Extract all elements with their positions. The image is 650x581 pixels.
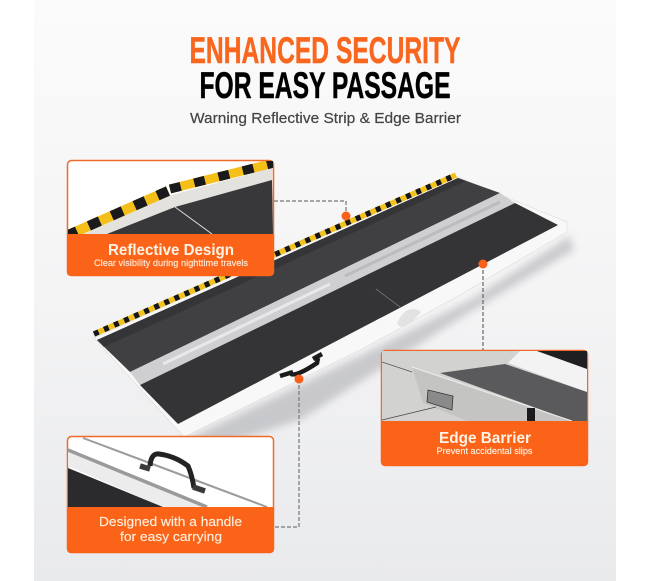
connector: edge barrier xyxy=(482,264,484,350)
caption text: Clear visibility during nighttime travels xyxy=(94,258,249,268)
title: FOR EASY PASSAGE xyxy=(200,65,450,106)
caption heading: Edge Barrier xyxy=(439,430,531,447)
panel: handle xyxy=(67,436,274,553)
caption heading: Reflective Design xyxy=(108,242,234,259)
title xyxy=(190,30,461,106)
marker dot: edge xyxy=(478,260,488,268)
ramp body xyxy=(94,176,567,437)
lower deck xyxy=(140,203,558,424)
marker dot: strip xyxy=(342,212,350,220)
caption text: Designed with a handle xyxy=(99,514,242,529)
caption band xyxy=(67,507,274,553)
connector: handle xyxy=(274,379,299,527)
caption band xyxy=(381,421,588,466)
warning strip xyxy=(94,175,456,334)
title: ENHANCED SECURITY xyxy=(190,30,461,71)
marker dot: handle xyxy=(294,374,304,384)
hinge bump xyxy=(397,309,421,326)
ramp illustration xyxy=(94,175,574,452)
photo: reflective strip close-up xyxy=(66,163,274,236)
caption text: for easy carrying xyxy=(120,529,222,544)
center rail xyxy=(130,193,515,385)
photo: edge barrier close-up xyxy=(382,351,587,421)
photo: handle close-up xyxy=(68,438,267,507)
hinge line xyxy=(376,289,400,307)
panel: edge barrier xyxy=(381,350,588,466)
subtitle: Warning Reflective Strip & Edge Barrier xyxy=(190,111,461,127)
caption text: Prevent accidental slips xyxy=(436,446,533,456)
caption text xyxy=(99,514,242,544)
caption band xyxy=(67,234,274,276)
connector: reflective design xyxy=(274,201,346,216)
panel: reflective design xyxy=(66,160,274,276)
ramp handle xyxy=(280,354,322,376)
upper deck xyxy=(97,178,500,372)
